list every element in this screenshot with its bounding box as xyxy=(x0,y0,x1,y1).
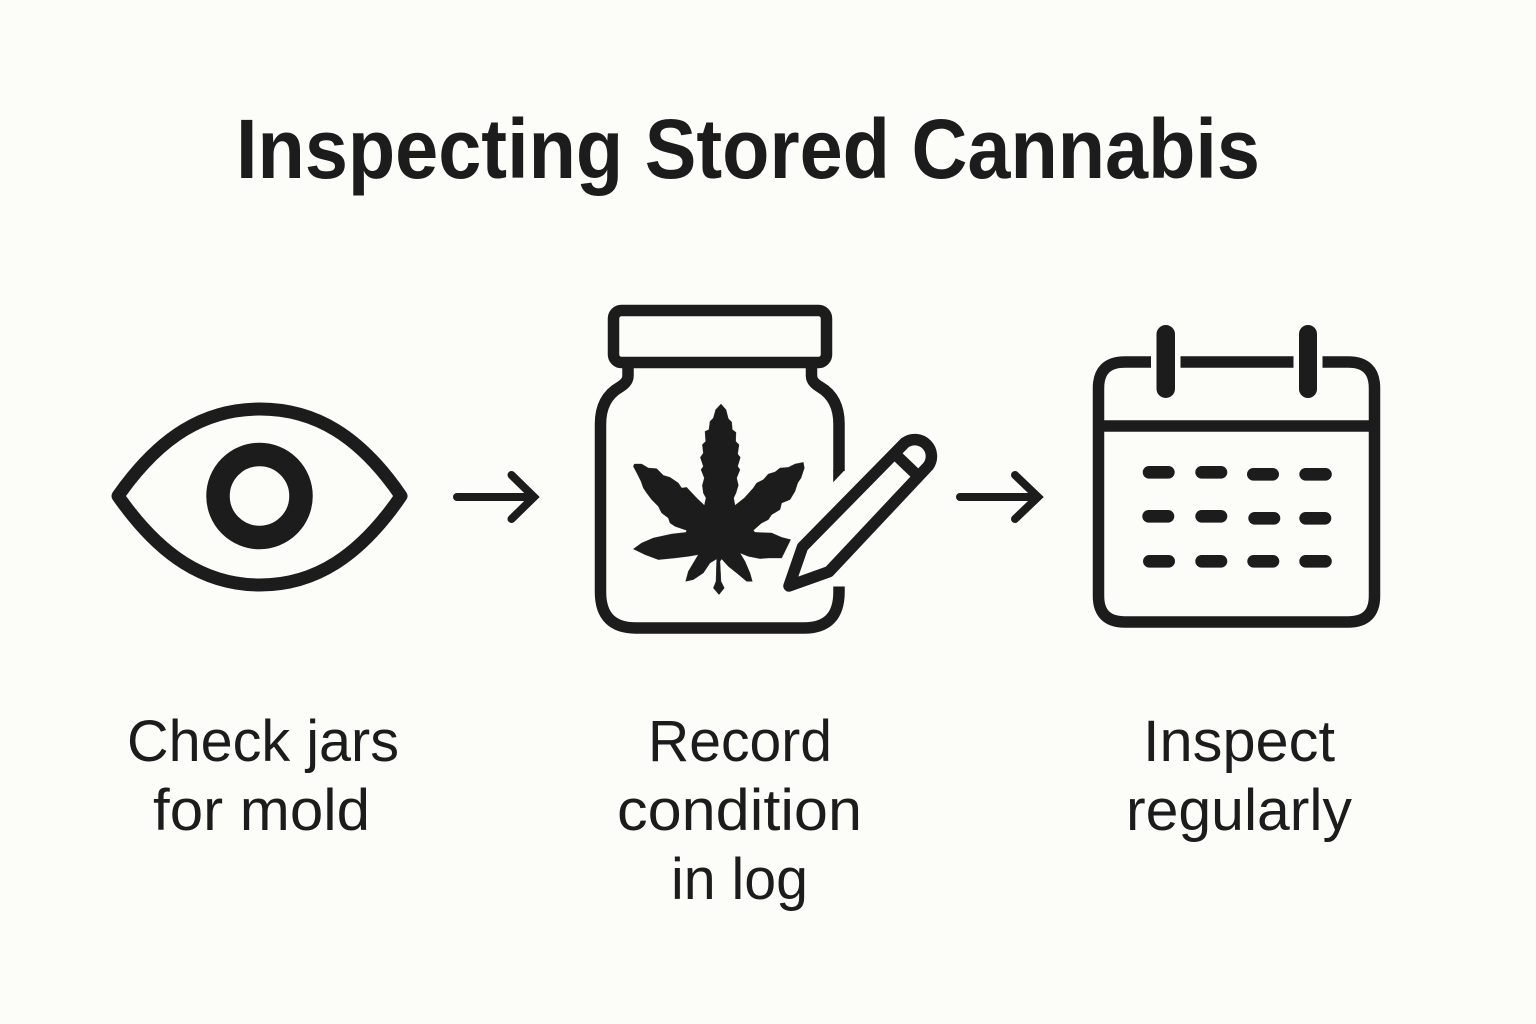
arrow: jar to calendar xyxy=(960,475,1038,519)
label: record condition in log: in log xyxy=(671,847,808,912)
label: inspect regularly: regularly xyxy=(1126,778,1352,843)
icon: eye xyxy=(118,409,401,585)
jar lid xyxy=(614,310,826,362)
label: check jars for mold: Check jars xyxy=(127,709,399,774)
icon: jar with leaf and pencil xyxy=(600,310,931,628)
calendar day marks xyxy=(1142,466,1332,568)
label: check jars for mold xyxy=(127,709,399,843)
icon: calendar xyxy=(1098,325,1374,622)
label: record condition in log: condition xyxy=(617,778,862,843)
cannabis leaf xyxy=(633,404,804,595)
pencil xyxy=(789,440,931,586)
title: Inspecting Stored Cannabis xyxy=(236,102,1260,196)
label: record condition in log: Record xyxy=(648,709,832,774)
arrow: eye to jar xyxy=(457,475,534,519)
calendar frame xyxy=(1098,362,1374,622)
jar body xyxy=(600,366,845,628)
label: record condition in log xyxy=(617,709,862,912)
calendar rings xyxy=(1156,325,1317,398)
label: inspect regularly: Inspect xyxy=(1143,709,1335,774)
label: inspect regularly xyxy=(1126,709,1352,843)
label: check jars for mold: for mold xyxy=(153,778,370,843)
